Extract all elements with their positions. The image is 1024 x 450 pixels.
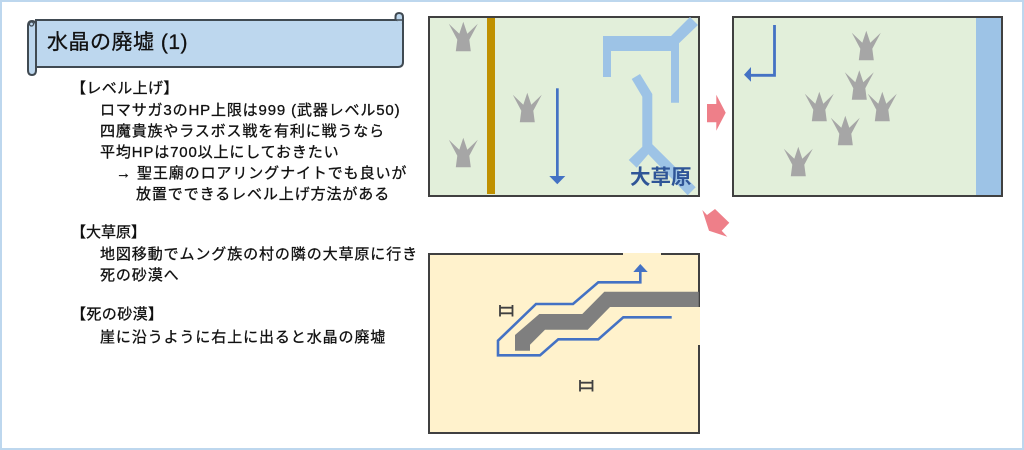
note: level up method: → 聖王廟のロアリングナイトでも良いが (116, 165, 407, 182)
body text: death desert: 崖に沿うように右上に出ると水晶の廃墟 (100, 329, 386, 346)
body text: great plains: 地図移動でムング族の村の隣の大草原に行き (100, 246, 418, 263)
text block: great plains (71, 224, 418, 284)
title scroll banner (28, 13, 403, 75)
text block: death desert (71, 306, 386, 346)
trees (449, 22, 542, 167)
trees (784, 31, 897, 176)
heading: death desert: 【死の砂漠】 (71, 306, 163, 323)
river lower (629, 74, 696, 195)
body text: great plains: 死の砂漠へ (100, 267, 180, 284)
note: level up method (116, 165, 407, 203)
body text: level up: 四魔貴族やラスボス戦を有利に戦うなら (100, 123, 385, 140)
river right edge (976, 18, 1001, 195)
ladder icon (580, 380, 592, 392)
arrow: to desert map (702, 209, 729, 237)
heading: great plains: 【大草原】 (71, 224, 146, 241)
panel: death desert map (429, 253, 700, 433)
route arrow (744, 25, 774, 82)
panel: upper right map (733, 17, 1002, 196)
body text: great plains (100, 246, 418, 284)
top exit gap (623, 253, 661, 256)
panel: great plains map (429, 17, 699, 196)
route arrow (498, 264, 672, 355)
body text: level up (100, 102, 400, 161)
heading: level up: 【レベル上げ】 (71, 80, 179, 97)
river upper (603, 17, 698, 103)
wall bar (487, 18, 495, 194)
note: level up method: 放置でできるレベル上げ方法がある (136, 186, 390, 203)
arrow: to upper right map (707, 95, 726, 131)
body text: level up: ロマサガ3のHP上限は999 (武器レベル50) (100, 102, 400, 119)
right exit gap (697, 307, 700, 345)
ladder icon (500, 305, 512, 316)
text block: level up (71, 80, 407, 203)
cliff (515, 292, 699, 351)
label: great plains: 大草原 (630, 166, 692, 189)
body text: level up: 平均HPは700以上にしておきたい (100, 144, 339, 161)
title: 水晶の廃墟 (1) (47, 31, 188, 54)
route arrow (549, 88, 565, 184)
